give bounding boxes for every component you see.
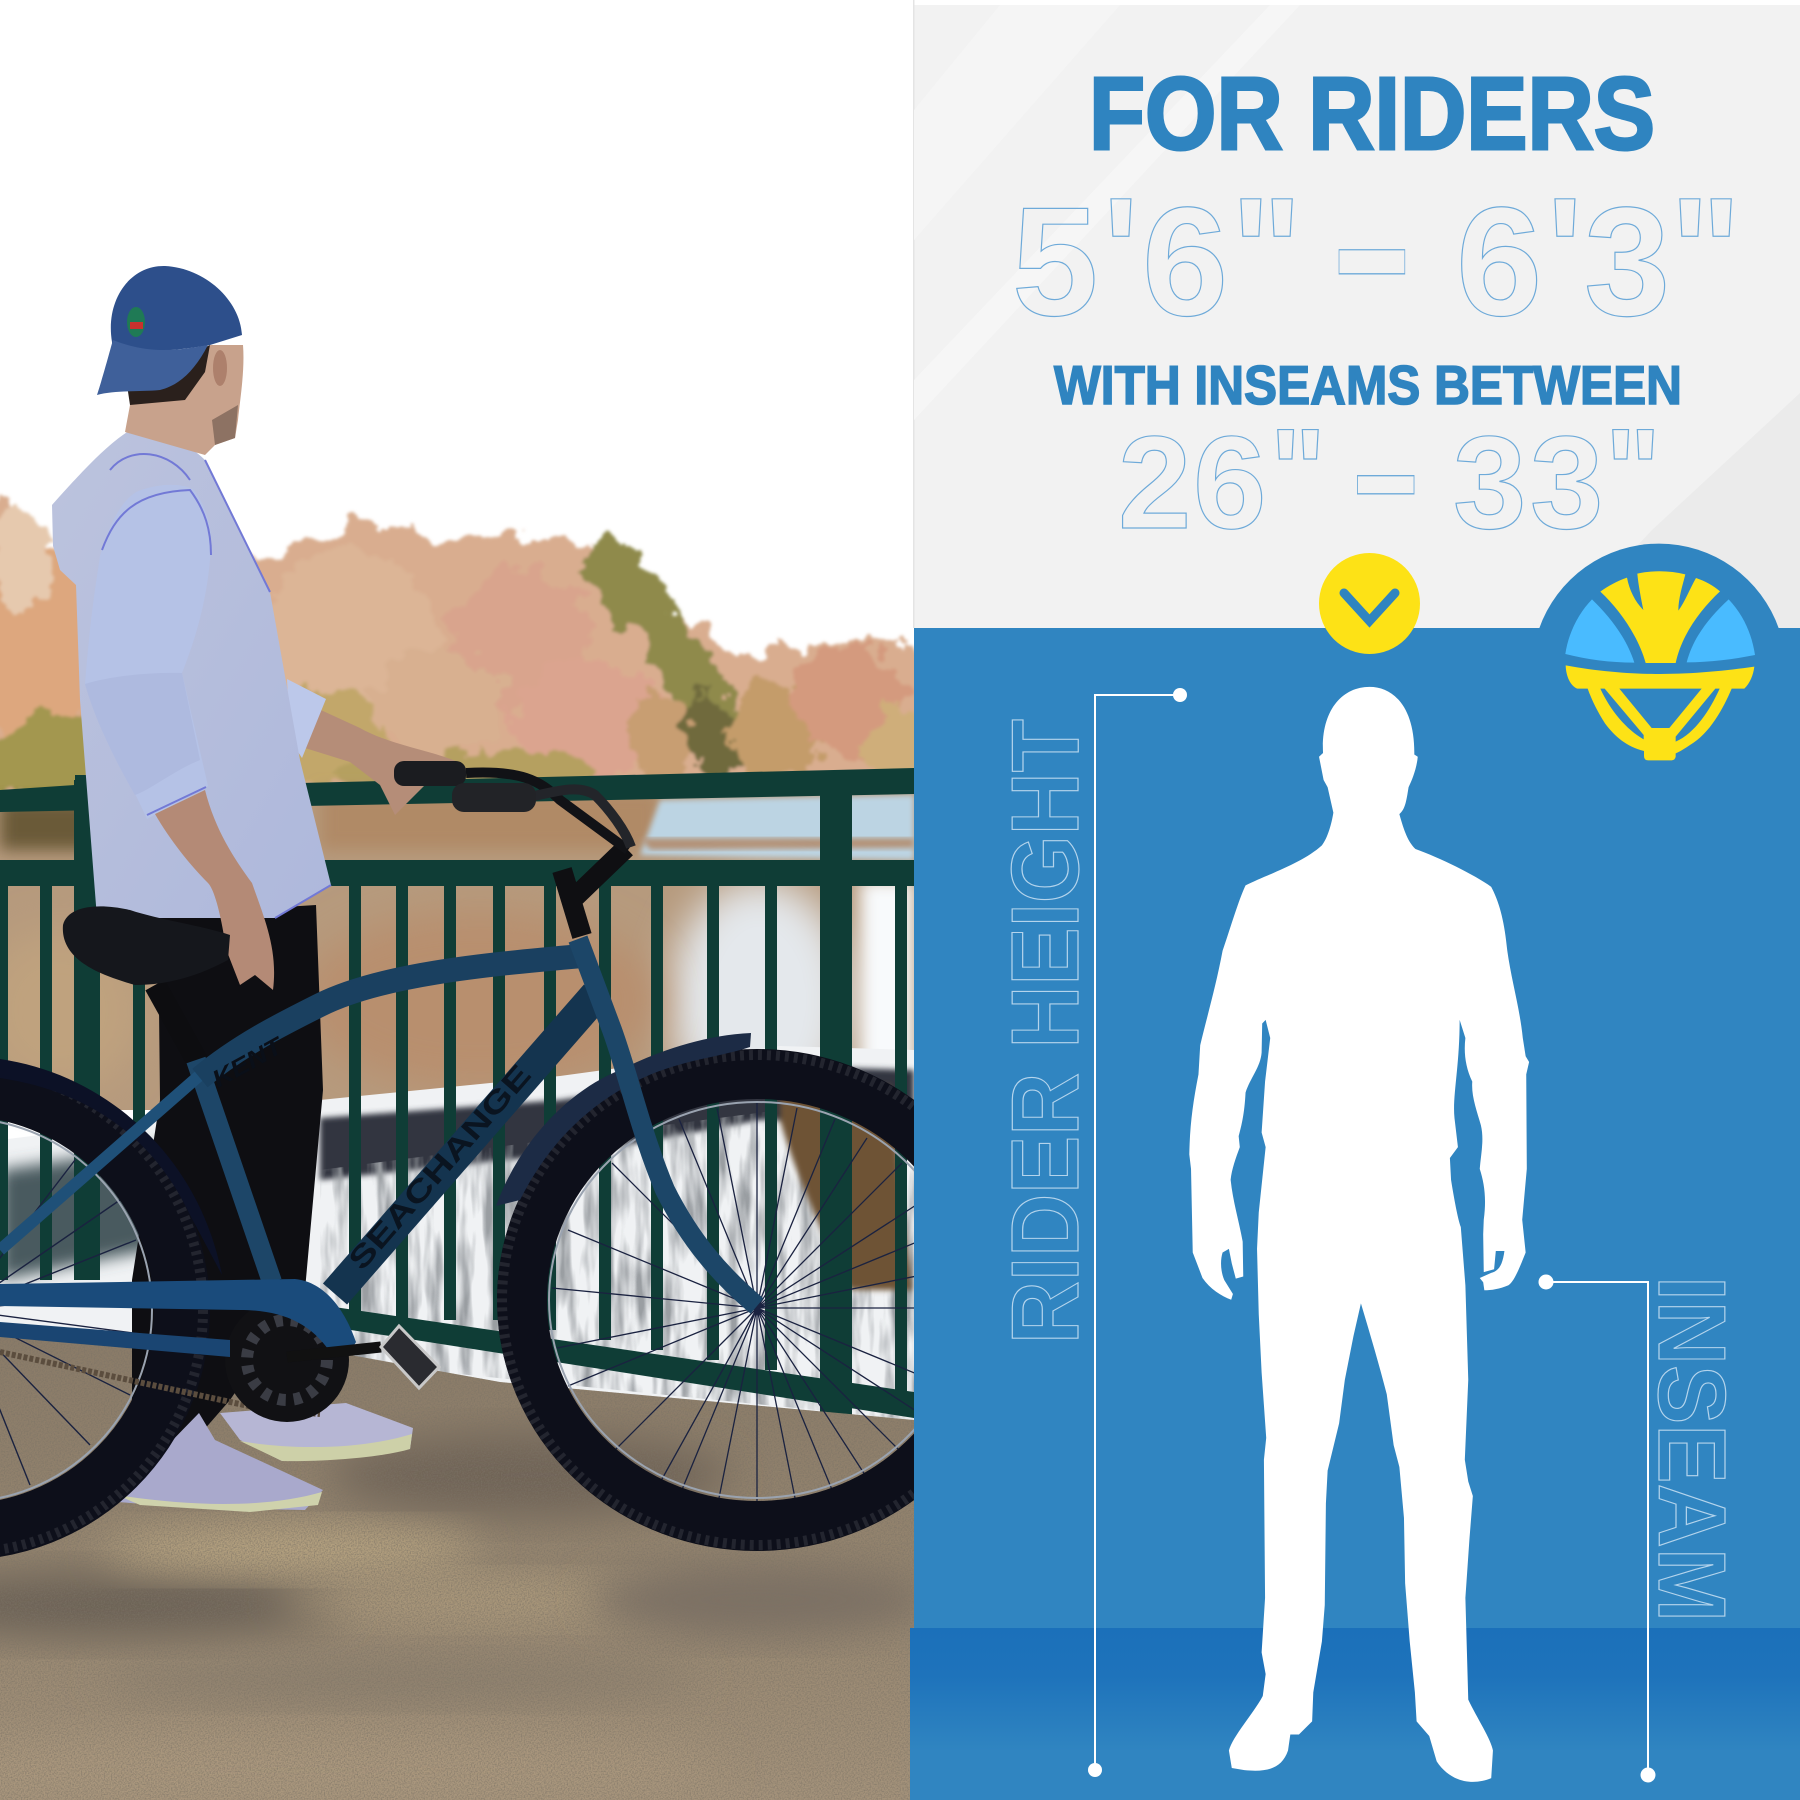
height range: ' " [1103,166,1302,334]
label: inseam: INSEAM [1638,1276,1745,1622]
rider [52,266,458,1512]
sleeve [85,485,211,819]
near arm and hand [155,790,274,990]
front wheel spokes [552,1103,962,1513]
chain case upper [0,1279,356,1352]
icon: helmet badge [1539,544,1779,760]
ground [0,1335,930,1800]
inseam range: – [1354,369,1418,574]
inseam range: 33 [1453,409,1603,556]
inseam measure line [1538,1274,1656,1782]
far sole [240,1434,412,1461]
front tread [502,1055,1012,1545]
front tyre [522,1074,992,1526]
bike brand: SEACHANGE: SEACHANGE [342,1059,538,1277]
pedal [381,1326,439,1388]
seat tube [196,1060,272,1282]
near sole [117,1492,322,1512]
river water [0,790,914,1120]
top tube [200,956,582,1078]
inseam range: " [1270,405,1326,537]
near shoe [117,1413,323,1510]
rear wheel spokes [0,1160,148,1485]
cap brim [97,340,208,395]
height range: ' " [1547,166,1741,334]
subheading: with inseams between: WITH INSEAMS BETWEEN [1054,354,1682,416]
saddle [63,906,230,985]
chain case lower [0,1322,230,1357]
autumn trees [0,493,914,790]
heading: FOR RIDERS: FOR RIDERS [1089,56,1655,171]
height range: – [1335,109,1409,379]
label: rider height: RIDER HEIGHT [992,719,1099,1344]
crank arm [287,1347,381,1357]
front fender [496,1033,751,1206]
icon: yellow chevron badge [1319,553,1420,654]
fork [578,939,757,1306]
height measure line [1088,688,1187,1777]
hoodie [52,431,331,918]
chain [0,1352,320,1414]
height range: 6 3 [1456,175,1670,348]
down tube [335,995,596,1294]
rear tyre [0,1088,182,1532]
bike brand: KENT: KENT [208,1031,290,1093]
railing [0,768,914,1472]
head and neck [125,345,243,455]
waterfall and foam [0,1046,914,1420]
lower handlebar [530,789,631,847]
stem [562,848,626,936]
grip far [394,761,466,786]
rolled sleeve folds [88,692,118,763]
trousers [132,905,323,1462]
bicycle [0,761,1012,1553]
height range: 5 6 [1012,175,1228,348]
person silhouette [1189,687,1529,1782]
panel: rider size [910,0,1800,1800]
seat post [155,985,200,1066]
seam [102,454,331,918]
ear and stubble [212,350,238,445]
rear rim [0,1118,152,1502]
front rim [549,1102,965,1498]
upper handlebar [466,772,628,850]
chainring [225,1298,349,1422]
far shoe [220,1403,413,1461]
rear stay [0,1075,200,1250]
far arm and hand [306,710,455,815]
far cuff [287,679,326,758]
rear tread [0,1067,203,1553]
photo: rider with cruiser bike on a bridge [0,266,914,1800]
inseam range: " [1605,405,1661,537]
cap crown [111,266,242,351]
hair [127,345,210,405]
inseam range: 26 [1118,409,1266,556]
height range [1012,109,1741,379]
inseam range [1118,369,1661,574]
rear fender [0,1059,222,1275]
cap logo [127,307,145,337]
grip near [452,783,536,812]
